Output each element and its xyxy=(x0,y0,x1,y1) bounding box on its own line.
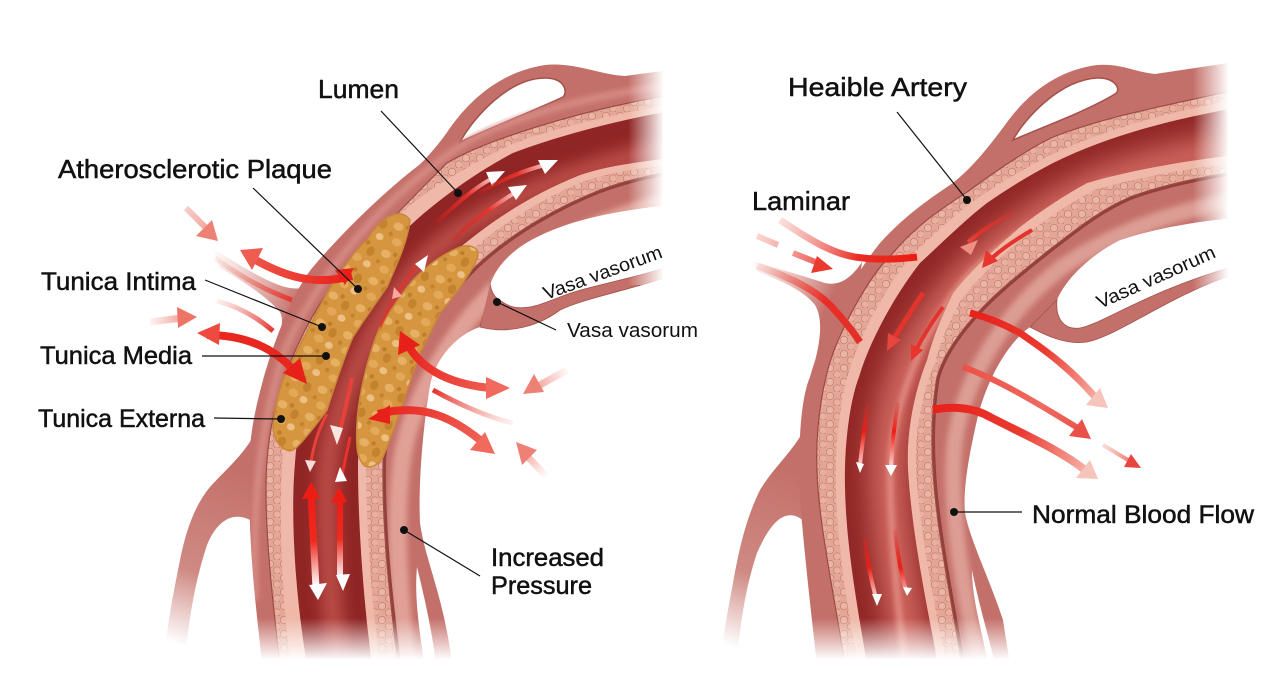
arrows: outside left xyxy=(150,208,354,384)
arrows: inflow from left xyxy=(757,220,917,342)
pale intima xyxy=(836,100,1235,665)
bottom and right fades xyxy=(240,55,678,675)
label: Increased Pressure: Pressure xyxy=(491,572,592,600)
bottom and right fades xyxy=(810,55,1243,675)
lower left side branch xyxy=(722,420,808,650)
panel: healthy artery xyxy=(722,55,1243,675)
lower left side branch xyxy=(165,425,258,650)
vessel outer wall xyxy=(249,78,670,665)
lumen shading xyxy=(327,148,670,665)
wall highlight xyxy=(254,85,670,665)
lumen xyxy=(293,111,670,665)
label: Tunica Externa: Tunica Externa xyxy=(38,405,205,433)
upper left side branch xyxy=(750,260,862,372)
dark wall line xyxy=(383,172,670,665)
tunica layer with cells xyxy=(817,90,1235,665)
loop branch at top xyxy=(953,62,1235,183)
loop opening xyxy=(460,78,565,142)
label: Lumen: Lumen xyxy=(318,74,399,104)
label: Vasa vasorum (rotated, right): Vasa vasorum xyxy=(1093,242,1219,314)
right vasa vasorum branch xyxy=(1030,266,1235,343)
label: Increased Pressure: Increased xyxy=(491,544,604,572)
panel: diseased artery with plaque xyxy=(150,55,678,675)
leader lines and dots xyxy=(202,111,1022,576)
pale intima xyxy=(281,105,670,665)
upper left side branch xyxy=(212,248,345,350)
lumen xyxy=(845,108,1235,665)
lower right fork opening xyxy=(972,570,995,665)
arrows: inside lumen xyxy=(856,213,1032,606)
loop branch at top xyxy=(395,65,670,185)
lower right fork opening xyxy=(416,567,436,665)
label: Vasa vasorum (left): Vasa vasorum xyxy=(567,320,698,342)
arrows: outflow to right xyxy=(933,313,1141,479)
label: Atherosclerotic Plaque: Atherosclerotic Plaque xyxy=(58,154,332,184)
arrows: outside right xyxy=(368,331,567,476)
wall highlight xyxy=(953,200,1235,665)
plaque: right xyxy=(357,246,478,467)
vessel outer wall xyxy=(799,75,1235,665)
label: Tunica Media: Tunica Media xyxy=(40,342,192,370)
label: Laminar: Laminar xyxy=(752,186,850,216)
arrows: inside lumen xyxy=(302,160,558,600)
label: Tunica Intima: Tunica Intima xyxy=(41,268,196,296)
plaque: left xyxy=(273,214,410,451)
loop opening xyxy=(1013,78,1118,140)
tunica layer with cells xyxy=(266,95,670,665)
dark wall line xyxy=(932,172,1235,665)
right vasa vasorum branch xyxy=(480,266,670,330)
label: Heaible Artery: Heaible Artery xyxy=(788,72,967,102)
label: Normal Blood Flow: Normal Blood Flow xyxy=(1032,501,1255,529)
lumen shading xyxy=(888,150,1235,665)
label: Vasa vasorum (rotated, left): Vasa vasorum xyxy=(541,242,665,305)
